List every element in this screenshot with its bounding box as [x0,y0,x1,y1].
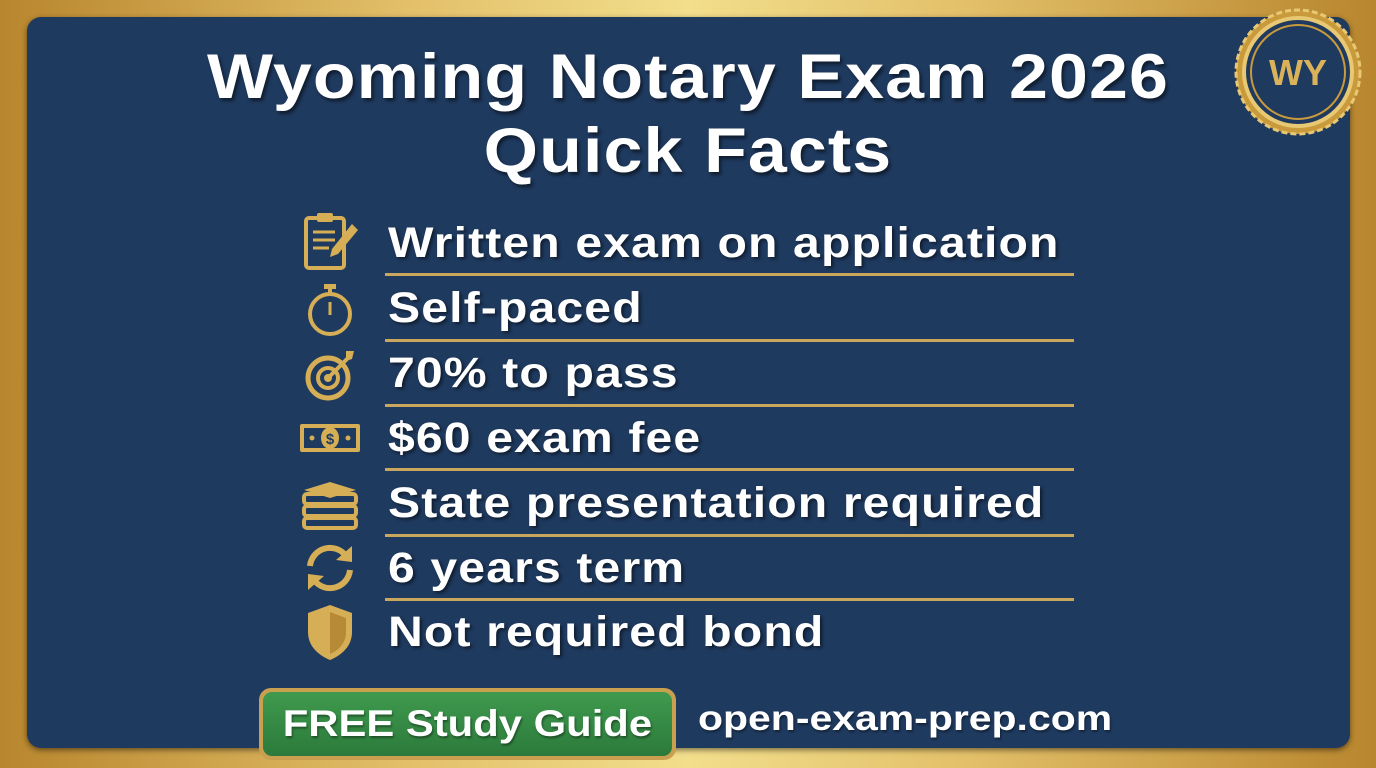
icon: books [302,482,358,530]
fact 4: $60 exam fee [388,414,701,462]
seal: WY: WY [1269,52,1327,93]
fact 6: 6 years term [388,544,685,592]
icon: target [306,351,354,400]
icon: refresh [307,544,353,592]
fact 5: State presentation required [388,479,1044,527]
fact 7: Not required bond [388,608,824,656]
seal: WY [1234,8,1362,136]
icon: shield [308,605,352,660]
icon: money [300,424,360,452]
title: Quick Facts [484,116,892,186]
fact 1: Written exam on application [388,219,1060,267]
fact 3: 70% to pass [388,349,679,397]
button: FREE Study Guide [259,688,676,760]
button: FREE Study Guide: FREE Study Guide [283,703,652,744]
fact 2: Self-paced [388,284,643,332]
icon: stopwatch [308,284,352,336]
title: Wyoming Notary Exam 2026 [207,42,1169,112]
icon: clipboard [304,213,358,270]
title [207,42,1169,189]
url: open-exam-prep.com [698,699,1112,738]
icon: money: $ [326,431,335,448]
